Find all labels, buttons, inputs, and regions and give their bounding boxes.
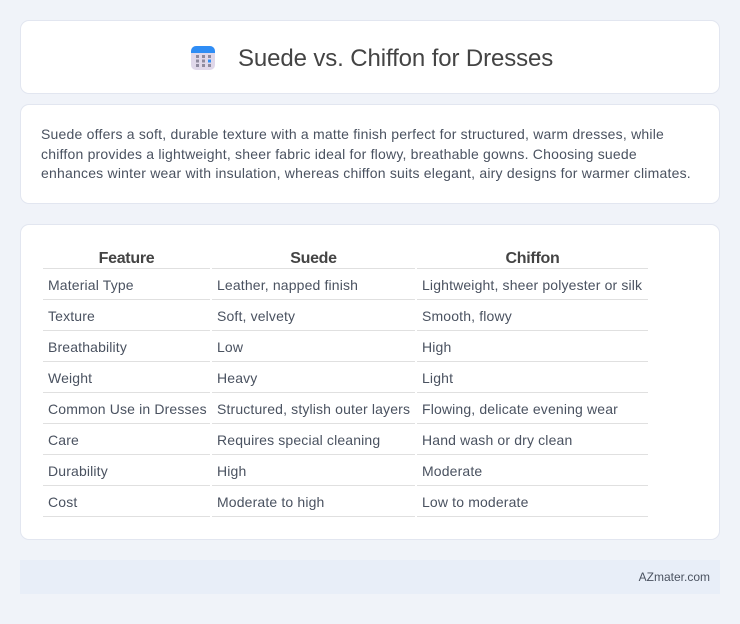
row: Care: Requires special cleaning bbox=[217, 432, 380, 448]
row: Material Type: Material Type bbox=[48, 277, 134, 293]
row: Breathability: Breathability bbox=[48, 339, 127, 355]
row: Common Use in Dresses: Common Use in Dresses bbox=[48, 401, 207, 417]
row: Texture: Texture bbox=[48, 308, 95, 324]
row: Care: Hand wash or dry clean bbox=[422, 432, 572, 448]
row: Weight: Heavy bbox=[217, 370, 257, 386]
row: Material Type: Lightweight, sheer polyester or silk bbox=[422, 277, 642, 293]
panel: intro text card bbox=[20, 104, 720, 204]
row: Durability bbox=[48, 463, 482, 479]
row: Care: Care bbox=[48, 432, 79, 448]
row: Cost: Cost bbox=[48, 494, 77, 510]
intro text: enhances winter wear with insulation, whereas chiffon suits elegant, airy designs for warmer climates. bbox=[41, 165, 691, 181]
row: Common Use in Dresses: Flowing, delicate evening wear bbox=[422, 401, 618, 417]
footer bar bbox=[20, 560, 720, 594]
panel: comparison table card bbox=[20, 224, 720, 540]
row: Breathability bbox=[48, 339, 451, 355]
row: Common Use in Dresses bbox=[48, 401, 618, 417]
row: Breathability: High bbox=[422, 339, 451, 355]
row: Texture: Soft, velvety bbox=[217, 308, 295, 324]
row: Material Type bbox=[48, 277, 642, 293]
row: Durability: High bbox=[217, 463, 246, 479]
row: Material Type: Leather, napped finish bbox=[217, 277, 358, 293]
header: Feature: Feature bbox=[99, 250, 154, 267]
row: Durability: Moderate bbox=[422, 463, 482, 479]
row: Durability: Durability bbox=[48, 463, 108, 479]
footer text: AZmater.com bbox=[639, 570, 710, 584]
intro text bbox=[41, 126, 691, 181]
intro text: chiffon provides a lightweight, sheer fabric ideal for flowy, breathable gowns. Choosing suede bbox=[41, 146, 637, 162]
row: Weight: Light bbox=[422, 370, 453, 386]
row: Weight: Weight bbox=[48, 370, 92, 386]
panel: title card bbox=[20, 20, 720, 94]
header: Chiffon: Chiffon bbox=[506, 250, 559, 267]
row: Cost bbox=[48, 494, 529, 510]
row: Texture: Smooth, flowy bbox=[422, 308, 512, 324]
row: Texture bbox=[48, 308, 512, 324]
row: Cost: Low to moderate bbox=[422, 494, 529, 510]
comparison table bbox=[43, 250, 648, 517]
row: Care bbox=[48, 432, 572, 448]
row: Cost: Moderate to high bbox=[217, 494, 324, 510]
title: Suede vs. Chiffon for Dresses bbox=[238, 45, 553, 72]
header: Suede: Suede bbox=[290, 250, 337, 267]
row: Weight bbox=[48, 370, 453, 386]
row: Breathability: Low bbox=[217, 339, 243, 355]
icon: calendar bbox=[191, 46, 215, 70]
row: Common Use in Dresses: Structured, stylish outer layers bbox=[217, 401, 410, 417]
intro text: Suede offers a soft, durable texture with a matte finish perfect for structured, warm dresses, while bbox=[41, 126, 664, 142]
